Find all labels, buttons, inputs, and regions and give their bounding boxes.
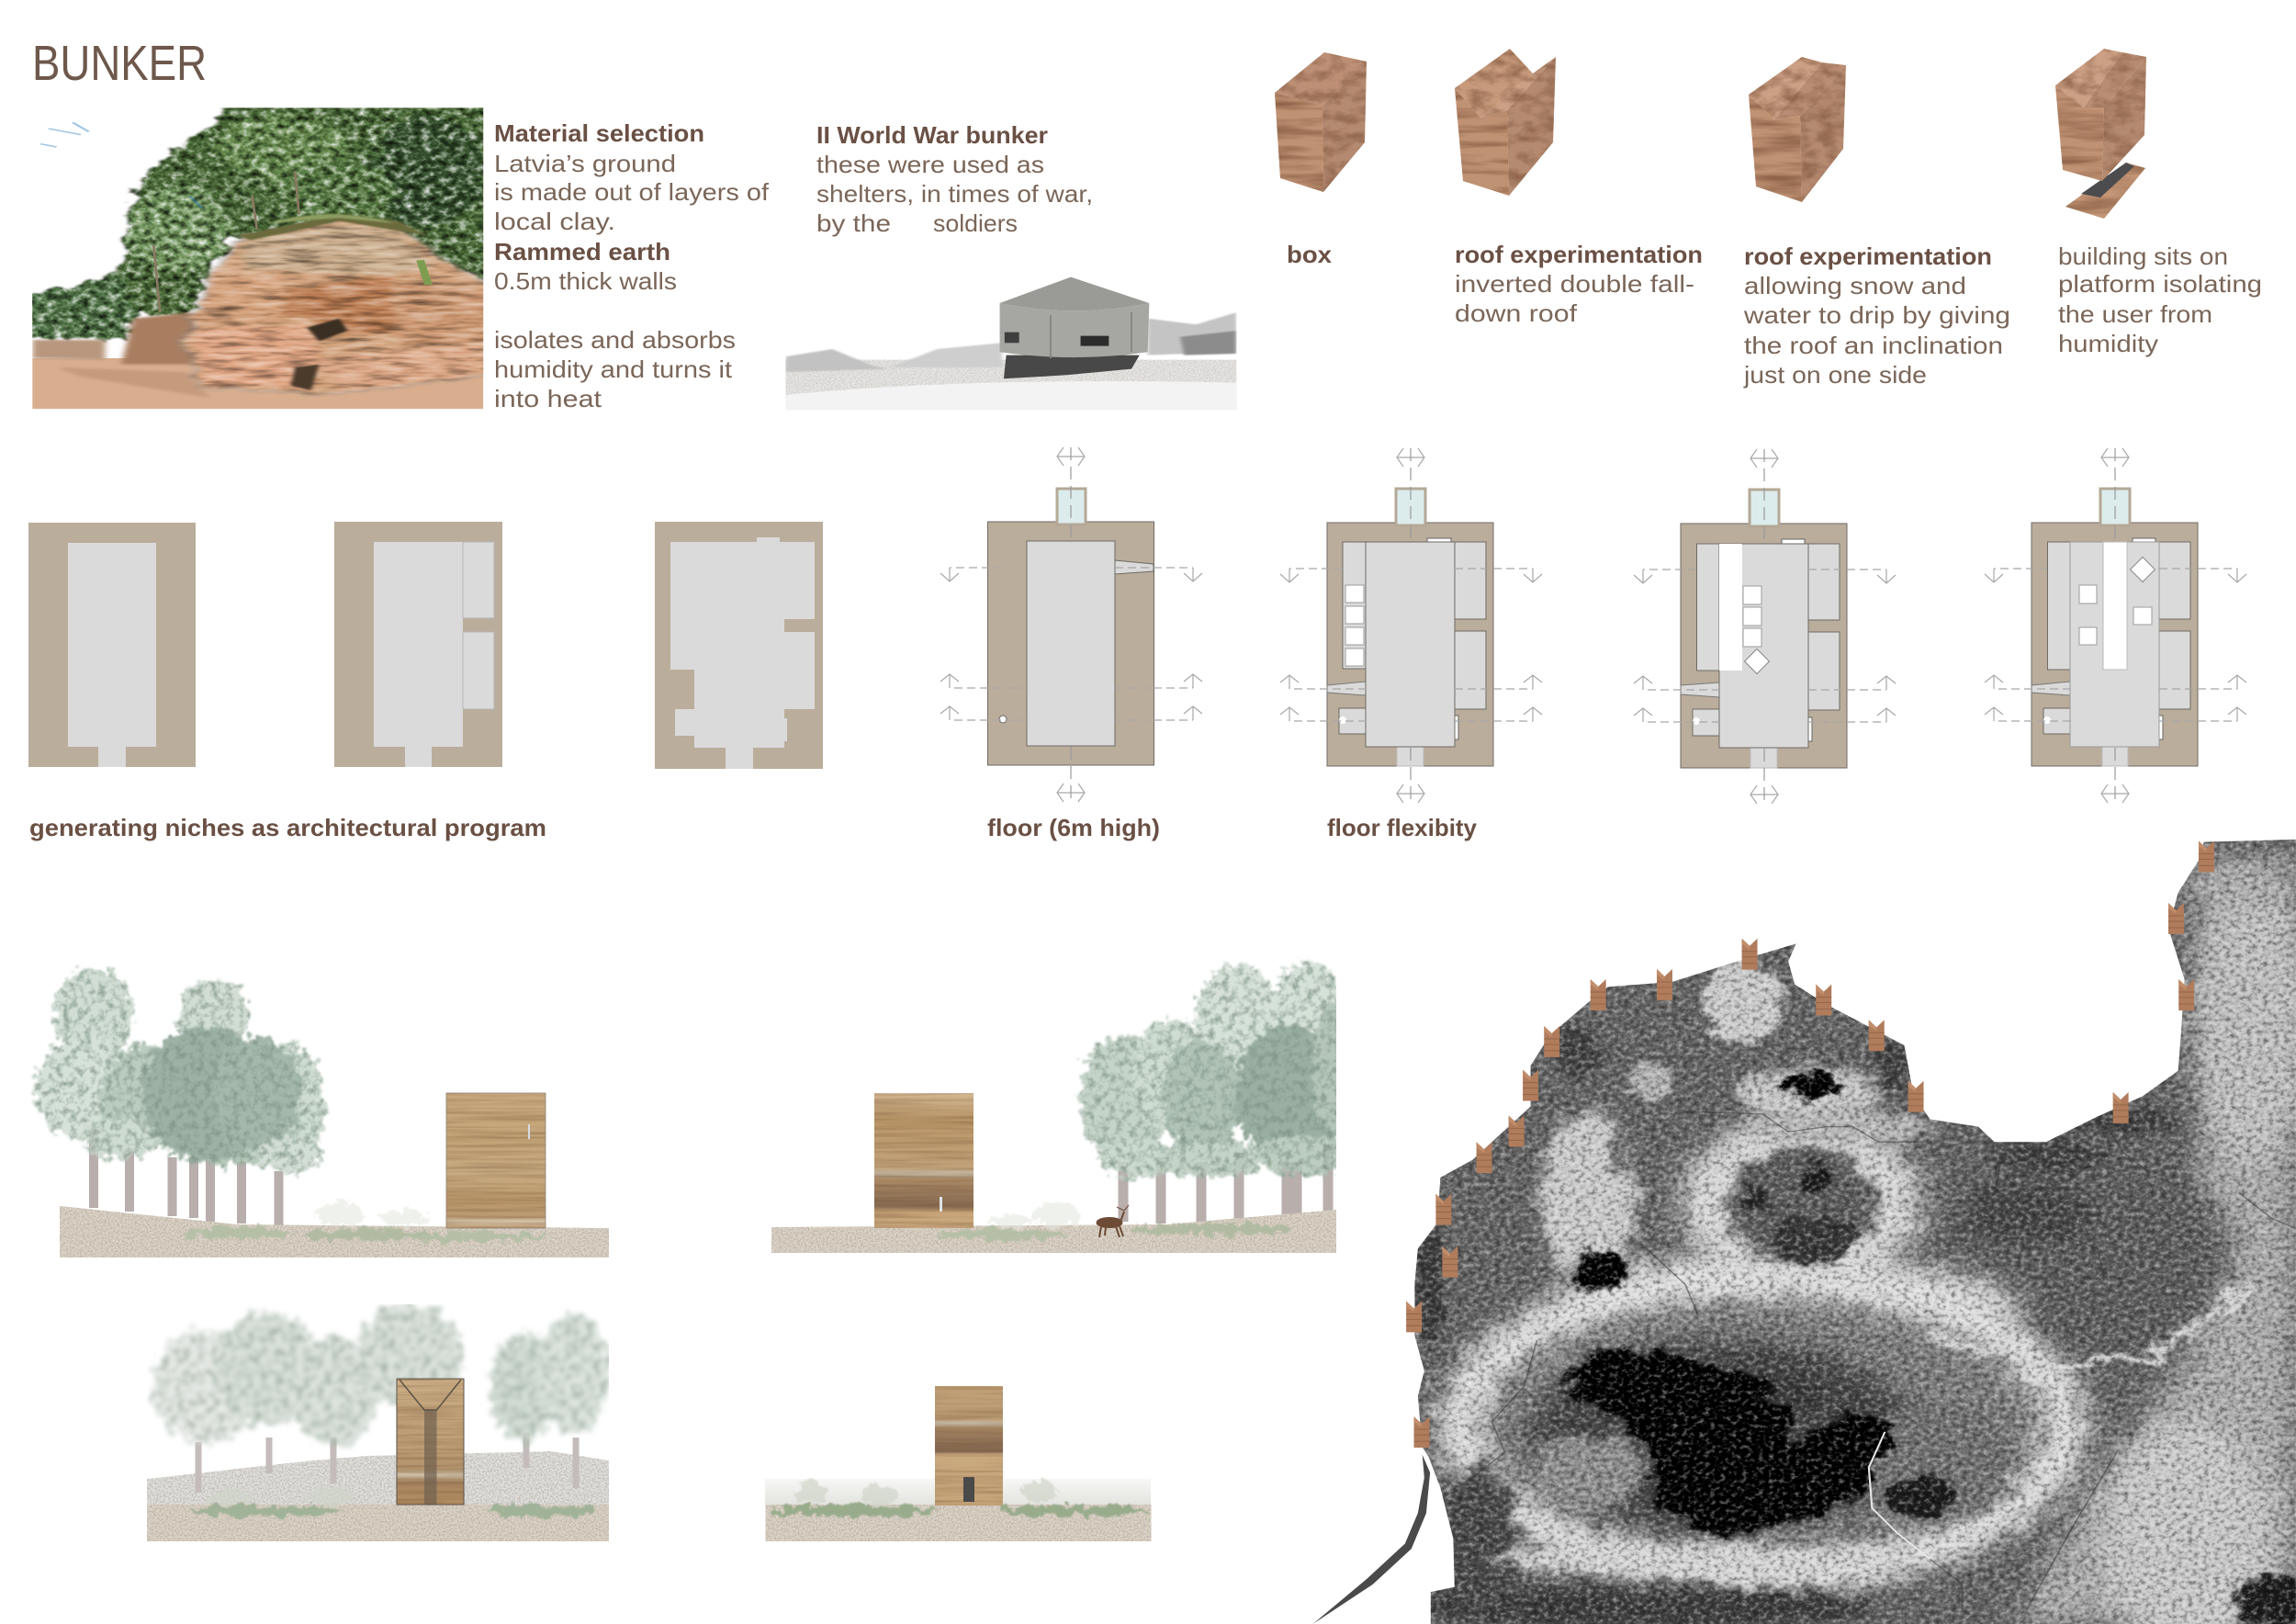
massing study 4: building on platform: humidity [2058, 330, 2158, 357]
text block: material selection: humidity and turns it [494, 355, 733, 383]
massing study 3: one-sided inclined roof [1743, 57, 2010, 389]
plan: floor 6m high [940, 447, 1202, 802]
text block: material selection: 0.5m thick walls [494, 267, 677, 295]
label: generating niches: generating niches as architectural program [29, 814, 546, 841]
text block: world war bunker: II World War bunker [816, 121, 1048, 149]
massing study 3: one-sided inclined roof: the roof an inclination [1744, 332, 2003, 359]
massing study 3: one-sided inclined roof: water to drip by giving [1743, 301, 2010, 329]
elevation: building beside pines on the left [35, 967, 609, 1257]
text block: world war bunker: by the [816, 209, 891, 237]
text block: world war bunker [816, 121, 1093, 237]
text block: material selection: Material selection [494, 119, 704, 147]
tree trunks [94, 1130, 279, 1225]
ground [147, 1505, 609, 1541]
elevation: building with deer and pines on the right [771, 962, 1350, 1253]
building [935, 1386, 1003, 1506]
building [446, 1093, 546, 1228]
photo: clay cliff with forest [24, 104, 493, 409]
trees [1079, 962, 1350, 1229]
massing study 2: inverted double roof: roof experimentation [1455, 241, 1703, 268]
text block: world war bunker: soldiers [933, 209, 1018, 237]
deer [1097, 1205, 1129, 1237]
rivers [1472, 1111, 2296, 1610]
text block: material selection: is made out of layers of [494, 178, 770, 206]
building [397, 1379, 464, 1505]
door [963, 1477, 974, 1502]
elevation: front view in fog [147, 1303, 611, 1541]
label: floor flexibility: floor flexibity [1327, 814, 1478, 841]
ground [60, 1206, 609, 1257]
tree crowns [35, 967, 325, 1174]
massing study 2: inverted double roof: down roof [1455, 299, 1578, 327]
vegetation [188, 1486, 597, 1517]
plan: plain volume [28, 523, 196, 767]
background haze [765, 1479, 1151, 1506]
text block: material selection: into heat [494, 385, 602, 412]
massing study 3: one-sided inclined roof: roof experimentation [1744, 242, 1992, 270]
building [874, 1093, 974, 1228]
elevation: rear view with door [765, 1386, 1152, 1541]
text block: world war bunker: these were used as [816, 151, 1044, 178]
massing study 3: one-sided inclined roof: just on one side [1743, 361, 1927, 389]
vegetation [937, 1201, 1295, 1240]
massing study 1: box: box [1287, 241, 1333, 268]
plan: floor flexibility 3 [1985, 448, 2246, 803]
foggy trees [152, 1303, 611, 1493]
title: BUNKER [32, 36, 207, 91]
vegetation [771, 1481, 1148, 1517]
bunker markers along the coast [1406, 841, 2214, 1448]
vegetation [184, 1202, 551, 1242]
plan: floor flexibility 1 [1280, 448, 1542, 803]
massing study 3: one-sided inclined roof: allowing snow and [1744, 272, 1966, 299]
plan: floor flexibility 2 [1634, 449, 1896, 804]
text block: material selection [494, 119, 770, 412]
massing study 4: building on platform [2055, 49, 2262, 357]
relief map of the coast [1286, 827, 2296, 1624]
text block: material selection: local clay. [494, 208, 615, 235]
massing study 4: building on platform: the user from [2058, 300, 2212, 328]
text block: material selection: Rammed earth [494, 238, 670, 265]
label: floor 6m high: floor (6m high) [987, 814, 1160, 841]
massing study 4: building on platform: platform isolating [2058, 270, 2262, 298]
text block: world war bunker: shelters, in times of war, [816, 180, 1093, 208]
massing study 4: building on platform: building sits on [2058, 242, 2228, 270]
ground [766, 1505, 1152, 1541]
background hill [147, 1451, 609, 1506]
massing study 1: box [1275, 52, 1367, 268]
plan: merged niches [655, 522, 823, 769]
text block: material selection: isolates and absorbs [494, 326, 736, 354]
massing study 2: inverted double roof [1455, 49, 1703, 327]
ground [771, 1210, 1336, 1253]
text block: material selection: Latvia’s ground [494, 150, 676, 177]
plan: side niches [334, 522, 502, 767]
sand spit [1312, 1455, 1430, 1624]
massing study 2: inverted double roof: inverted double fall- [1455, 270, 1694, 298]
photo: world war bunker [785, 277, 1236, 411]
elevation shading [1414, 840, 2296, 1624]
